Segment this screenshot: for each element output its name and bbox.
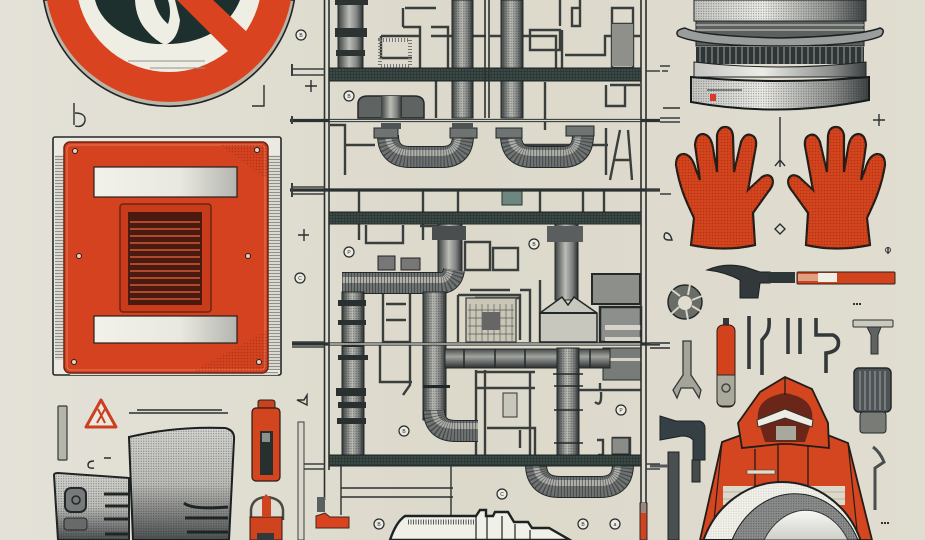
small dots [853, 304, 889, 523]
red-handled screwdriver [640, 503, 647, 540]
metal canister top right [677, 0, 883, 110]
callout markers: B [532, 242, 536, 248]
wrench [673, 341, 701, 398]
small bolt [650, 343, 670, 348]
callout markers [295, 30, 626, 529]
ring mark [886, 248, 890, 252]
small marks around sign [74, 85, 264, 126]
hood [540, 297, 597, 342]
safety jacket [700, 377, 872, 540]
misc sketch marks [663, 108, 888, 254]
sign shading lines [128, 61, 205, 68]
main duct schematic [290, 0, 660, 540]
pocket tab [747, 470, 775, 474]
metal rod [58, 406, 67, 460]
callout markers: B [347, 94, 351, 100]
vertical rails [324, 0, 646, 505]
side stubs [291, 69, 660, 469]
upper label [94, 167, 237, 197]
hook rod [873, 447, 884, 510]
dark nozzle [660, 416, 705, 482]
pipes: middle section [438, 212, 462, 278]
warning triangle [86, 400, 116, 427]
callout markers: P [347, 250, 351, 256]
screws [72, 148, 262, 364]
gear ring [668, 284, 702, 320]
red padlock tag [250, 494, 283, 540]
flame centre [135, 0, 180, 45]
collar and placket lines [755, 378, 808, 495]
red valve at rail foot [317, 497, 325, 512]
ribbed filter [854, 368, 891, 433]
beams [290, 120, 660, 344]
equipment boxes [592, 274, 640, 304]
lower label [94, 316, 237, 343]
sketch lines [129, 410, 228, 413]
white helmet [704, 482, 860, 540]
callout markers: B [299, 33, 303, 39]
bottom valve [390, 510, 570, 540]
red fire device [252, 400, 280, 481]
tall dark post [668, 452, 679, 540]
slash [177, 0, 262, 53]
tool rods [749, 316, 838, 375]
T fitting [853, 320, 893, 354]
lower U-bend [536, 464, 623, 487]
U-bends [388, 135, 463, 157]
callout markers: B [377, 522, 381, 528]
laces [104, 494, 228, 534]
small letter marks [88, 458, 111, 468]
floor slabs [329, 68, 641, 81]
callout markers: C [500, 492, 504, 498]
vent grille [120, 204, 211, 312]
callout markers: a [614, 522, 617, 528]
callout markers: C [298, 276, 302, 282]
plumb mark between gloves [775, 114, 885, 234]
left glove [676, 127, 773, 248]
flame silhouette [95, 0, 240, 44]
prohibition sign: no fire [44, 0, 294, 106]
left tall post [298, 422, 304, 540]
right glove [788, 127, 885, 248]
thin background schematics [381, 0, 640, 68]
callout markers: B [581, 522, 585, 528]
hood [738, 377, 829, 448]
red wall panel with vent [53, 137, 281, 375]
callout markers: B [402, 429, 406, 435]
pipes: upper section [338, 0, 363, 68]
callout markers: P [619, 408, 623, 414]
boot [54, 428, 234, 540]
hammer [707, 265, 895, 298]
red extinguisher [717, 318, 735, 407]
